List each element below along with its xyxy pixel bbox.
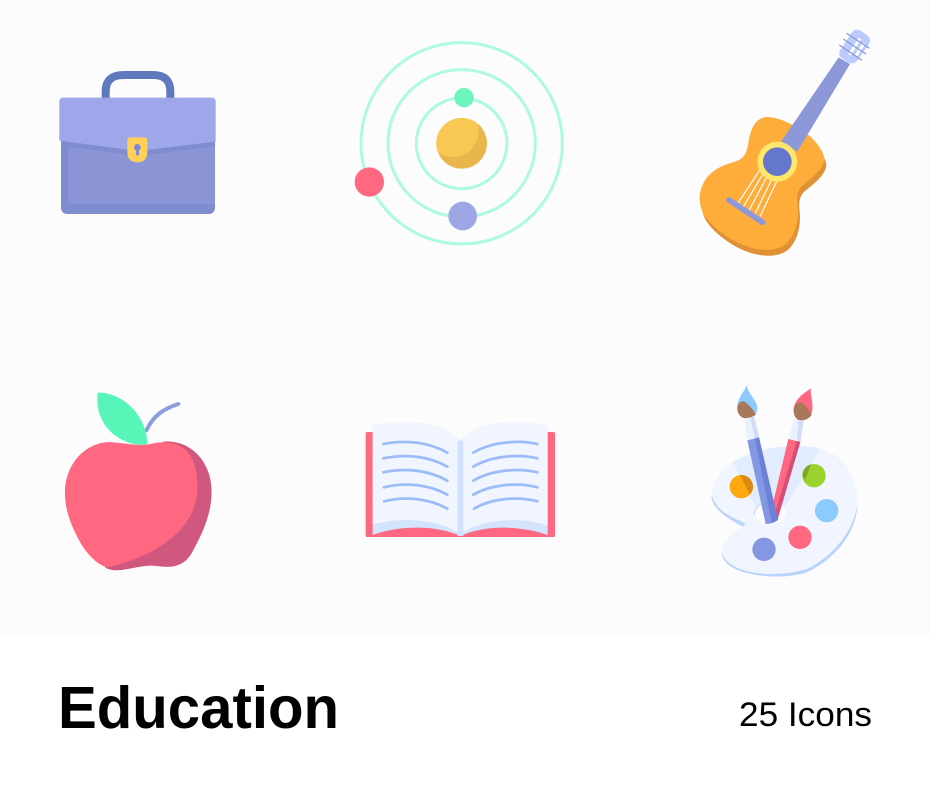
icon: guitar [700,30,870,256]
title: Education [58,675,339,741]
icon: paint palette [712,385,857,577]
icon: solar system [355,43,562,244]
brush: red [773,388,813,520]
icon: briefcase [59,75,216,214]
paint dots [730,463,838,561]
icon: open book [366,423,555,537]
icon count: 25 Icons [739,696,872,734]
icon: apple [65,393,212,570]
brush: blue [737,385,778,524]
